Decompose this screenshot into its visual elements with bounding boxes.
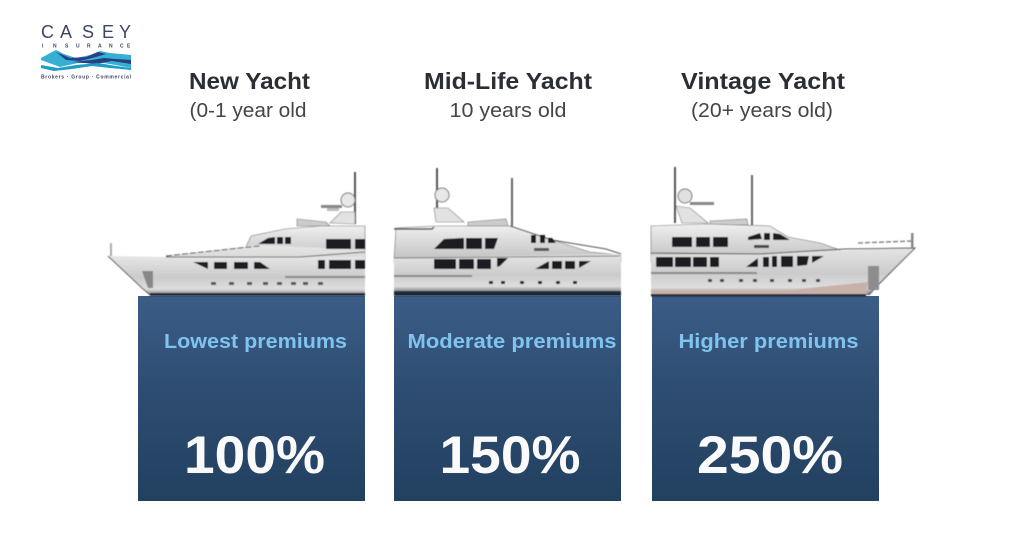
- panel: new yacht premiums: Lowest premiums: [164, 331, 347, 353]
- logo: Casey Insurance: INSURANCE: [42, 44, 131, 50]
- panel: new yacht premiums: 100%: [184, 426, 325, 485]
- heading: Vintage Yacht: Vintage Yacht: [681, 68, 845, 94]
- panel: mid-life yacht premiums: Moderate premiums: [408, 331, 616, 353]
- yacht: mid-life, midsection: [394, 168, 621, 296]
- logo: Casey Insurance: CASEY: [41, 22, 131, 42]
- logo: Casey Insurance: [41, 22, 132, 80]
- yacht: new, bow section: [108, 172, 365, 296]
- logo: Casey Insurance: Brokers · Group · Commercial: [41, 74, 132, 80]
- panel: vintage yacht premiums: [652, 296, 879, 501]
- heading: New Yacht: New Yacht: [189, 68, 310, 94]
- heading: Mid-Life Yacht: [424, 68, 592, 122]
- panel: mid-life yacht premiums: [394, 296, 621, 501]
- panel: vintage yacht premiums: 250%: [697, 426, 843, 485]
- heading: Mid-Life Yacht: Mid-Life Yacht: [424, 68, 592, 94]
- panel: vintage yacht premiums: Higher premiums: [678, 331, 858, 353]
- heading: Vintage Yacht: (20+ years old): [691, 99, 833, 122]
- heading: New Yacht: [189, 68, 310, 122]
- heading: New Yacht: (0-1 year old: [190, 99, 306, 122]
- panel: new yacht premiums: [138, 296, 365, 501]
- yacht: vintage, bow section: [651, 167, 915, 296]
- panel: mid-life yacht premiums: 150%: [440, 426, 580, 485]
- heading: Mid-Life Yacht: 10 years old: [450, 99, 566, 122]
- heading: Vintage Yacht: [681, 68, 845, 122]
